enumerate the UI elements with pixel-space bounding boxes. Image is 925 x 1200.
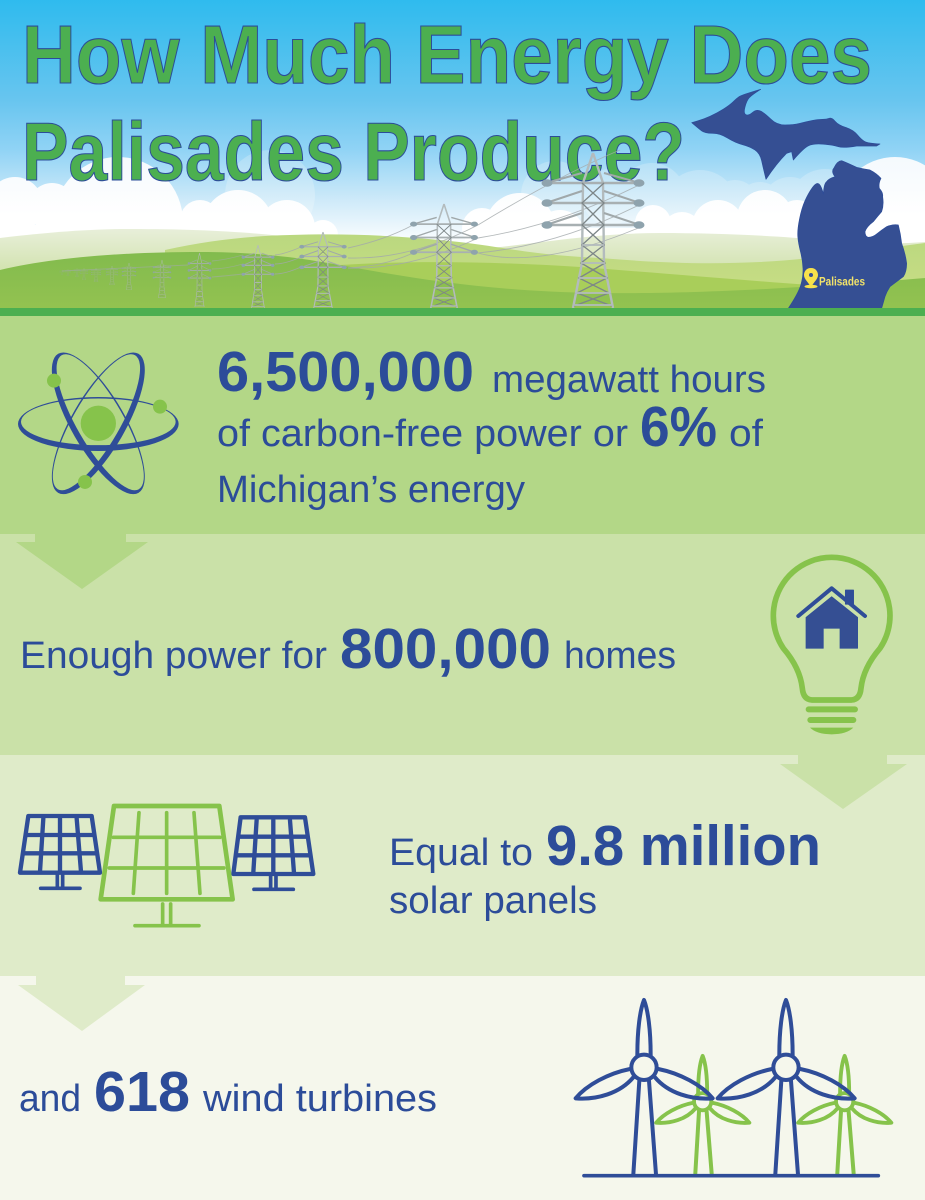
icon: location pin bbox=[804, 268, 818, 288]
panel: wind turbines bbox=[0, 976, 925, 1200]
map: Michigan with Palisades marker bbox=[692, 89, 907, 308]
panel: homes bbox=[0, 534, 925, 755]
power lines bbox=[62, 150, 643, 277]
text: and 618 wind turbines: and bbox=[19, 1078, 81, 1120]
arrow bbox=[780, 755, 907, 809]
text: equal to 9.8 million solar panels bbox=[389, 814, 821, 922]
panel: header sky scene bbox=[0, 0, 925, 308]
hills bbox=[0, 229, 925, 308]
text: equal to 9.8 million solar panels: solar panels bbox=[389, 880, 597, 922]
text: 6,500,000 megawatt hours: megawatt hours bbox=[492, 359, 766, 401]
white clouds bbox=[0, 157, 925, 287]
text: equal to 9.8 million solar panels: 9.8 million bbox=[546, 814, 821, 878]
text: 6,500,000 megawatt hours: of carbon-free power or bbox=[217, 413, 628, 455]
header divider band bbox=[0, 308, 925, 316]
text: and 618 wind turbines: wind turbines bbox=[202, 1078, 437, 1120]
text: enough power for 800,000 homes: 800,000 bbox=[340, 617, 551, 681]
text: enough power for 800,000 homes: Enough power for bbox=[20, 635, 327, 677]
label: Palisades: Palisades bbox=[819, 276, 865, 288]
title: Palisades Produce? bbox=[22, 105, 685, 198]
text: 6,500,000 megawatt hours: of bbox=[729, 413, 763, 455]
title bbox=[22, 8, 872, 198]
text: and 618 wind turbines bbox=[19, 1060, 437, 1124]
text: and 618 wind turbines: 618 bbox=[94, 1060, 190, 1124]
icon: solar panels bbox=[20, 806, 313, 926]
text: 6,500,000 megawatt hours: 6% bbox=[640, 395, 717, 459]
text: 6,500,000 megawatt hours bbox=[217, 340, 766, 511]
text: 6,500,000 megawatt hours: 6,500,000 bbox=[217, 340, 474, 404]
panel: solar panels bbox=[0, 755, 925, 976]
icon: light bulb with house bbox=[773, 557, 890, 734]
arrow bbox=[18, 976, 145, 1031]
text: 6,500,000 megawatt hours: Michigan’s energy bbox=[217, 469, 525, 511]
text: enough power for 800,000 homes: homes bbox=[564, 635, 676, 677]
transmission towers bbox=[59, 153, 645, 308]
text: equal to 9.8 million solar panels: Equal to bbox=[389, 832, 533, 874]
panel: megawatt hours bbox=[0, 316, 925, 534]
arrow bbox=[16, 534, 148, 589]
icon: wind turbines bbox=[576, 1000, 891, 1176]
pale background clouds bbox=[225, 150, 861, 246]
icon: atom bbox=[18, 340, 179, 506]
text: enough power for 800,000 homes bbox=[20, 617, 676, 681]
